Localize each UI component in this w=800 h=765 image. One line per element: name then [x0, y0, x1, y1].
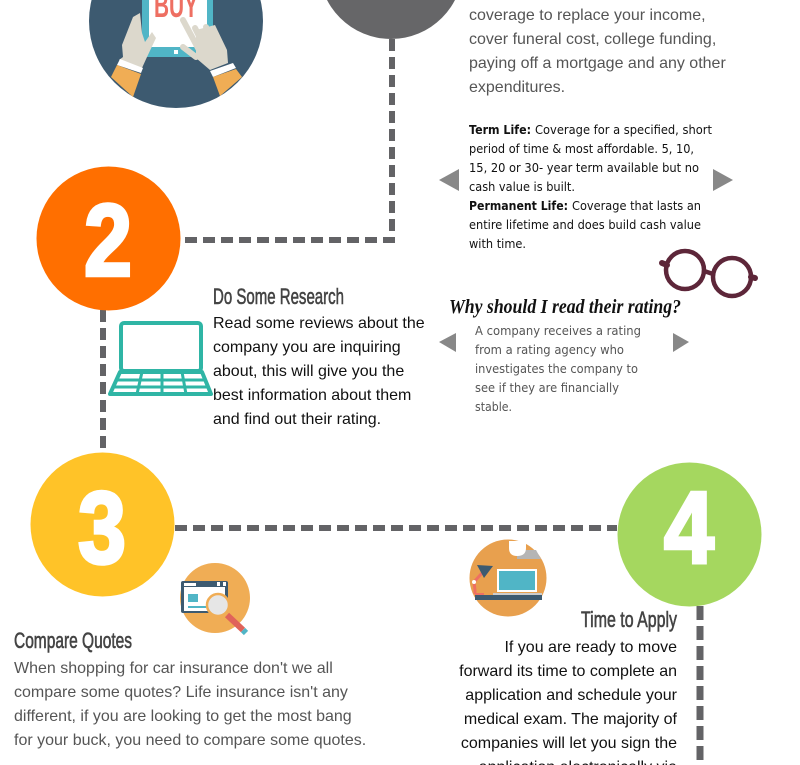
text: compare quotes description: When shopping for car insurance don't we all — [14, 660, 333, 677]
text: compare quotes description — [14, 660, 366, 749]
text: research description: company you are inquiring — [213, 339, 401, 356]
step 2 circle with number — [36, 166, 180, 310]
text: time to apply description: If you are ready to move — [504, 639, 677, 656]
dashed connector: step 3 to step 4 — [175, 525, 617, 531]
text: time to apply description — [459, 639, 678, 765]
text: step 1 description: expenditures. — [469, 79, 565, 96]
text: research description — [213, 315, 425, 428]
text: term and permanent life: 15, 20 or 30- year term available but no — [469, 160, 699, 175]
text: rating explanation: investigates the company to — [475, 361, 638, 376]
icon: tablet with BUY and hands — [89, 0, 263, 108]
icon: laptop — [110, 323, 211, 394]
text: research description: Read some reviews about the — [213, 315, 425, 332]
text: time to apply description: medical exam. The majority of — [464, 711, 678, 728]
text: rating explanation: from a rating agency who — [475, 342, 624, 357]
text: term and permanent life: entire lifetime and does build cash value — [469, 217, 701, 232]
heading: why read rating: Why should I read their rating? — [449, 296, 681, 318]
step 4 circle with number — [618, 462, 762, 606]
text: research description: best information about them — [213, 387, 411, 404]
text: term and permanent life: cash value is built. — [469, 179, 575, 194]
text: term and permanent life — [469, 122, 712, 251]
text: rating explanation — [475, 323, 641, 414]
step 3 circle with number — [30, 452, 174, 596]
arrow: term life right — [713, 169, 733, 191]
text: step 1 description: cover funeral cost, college funding, — [469, 31, 716, 48]
icon: desk with laptop and lamp — [470, 540, 546, 616]
text: rating explanation: see if they are financially — [475, 380, 620, 395]
step 1 circle — [319, 0, 463, 39]
text: time to apply description: companies will let you sign the — [461, 735, 677, 752]
heading: do some research: Do Some Research — [213, 284, 344, 309]
text: compare quotes description: compare some quotes? Life insurance isn't any — [14, 684, 348, 701]
text: term and permanent life: Coverage that lasts an — [572, 198, 701, 213]
heading: compare quotes: Compare Quotes — [14, 628, 132, 653]
text: term and permanent life: period of time & most affordable. 5, 10, — [469, 141, 694, 156]
text: term and permanent life: Term Life: — [469, 122, 531, 137]
text: term and permanent life: Permanent Life: — [469, 198, 568, 213]
icon: browser with magnifier — [180, 563, 250, 633]
arrow: rating left — [439, 333, 456, 352]
text: compare quotes description: for your buck, you need to compare some quotes. — [14, 732, 366, 749]
text: research description: about, this will give you the — [213, 363, 404, 380]
text: time to apply description: application and schedule your — [465, 687, 678, 704]
step 2 circle with number: 2 — [84, 184, 132, 298]
text: compare quotes description: different, if you are looking to get the most bang — [14, 708, 352, 725]
text: time to apply description: forward its time to complete an — [459, 663, 677, 680]
arrow: term life left — [439, 169, 459, 191]
text: term and permanent life: with time. — [469, 236, 526, 251]
text: rating explanation: A company receives a rating — [475, 323, 641, 338]
step 4 circle with number: 4 — [664, 471, 714, 585]
text: step 1 description: coverage to replace your income, — [469, 7, 706, 24]
text: research description: and find out their rating. — [213, 411, 381, 428]
dashed connector: step 1 to step 2 — [181, 39, 392, 240]
arrow: rating right — [673, 333, 689, 352]
dashed connector: step 4 downward — [696, 606, 704, 765]
text: term and permanent life: Coverage for a specified, short — [535, 122, 712, 137]
text: step 1 description — [469, 7, 726, 96]
icon: glasses — [662, 251, 755, 296]
text: step 1 description: paying off a mortgage and any other — [469, 55, 726, 72]
step 3 circle with number: 3 — [78, 471, 126, 585]
text: rating explanation: stable. — [475, 399, 512, 414]
dashed connector: step 2 to step 3 — [100, 310, 106, 453]
heading: time to apply: Time to Apply — [581, 607, 677, 632]
